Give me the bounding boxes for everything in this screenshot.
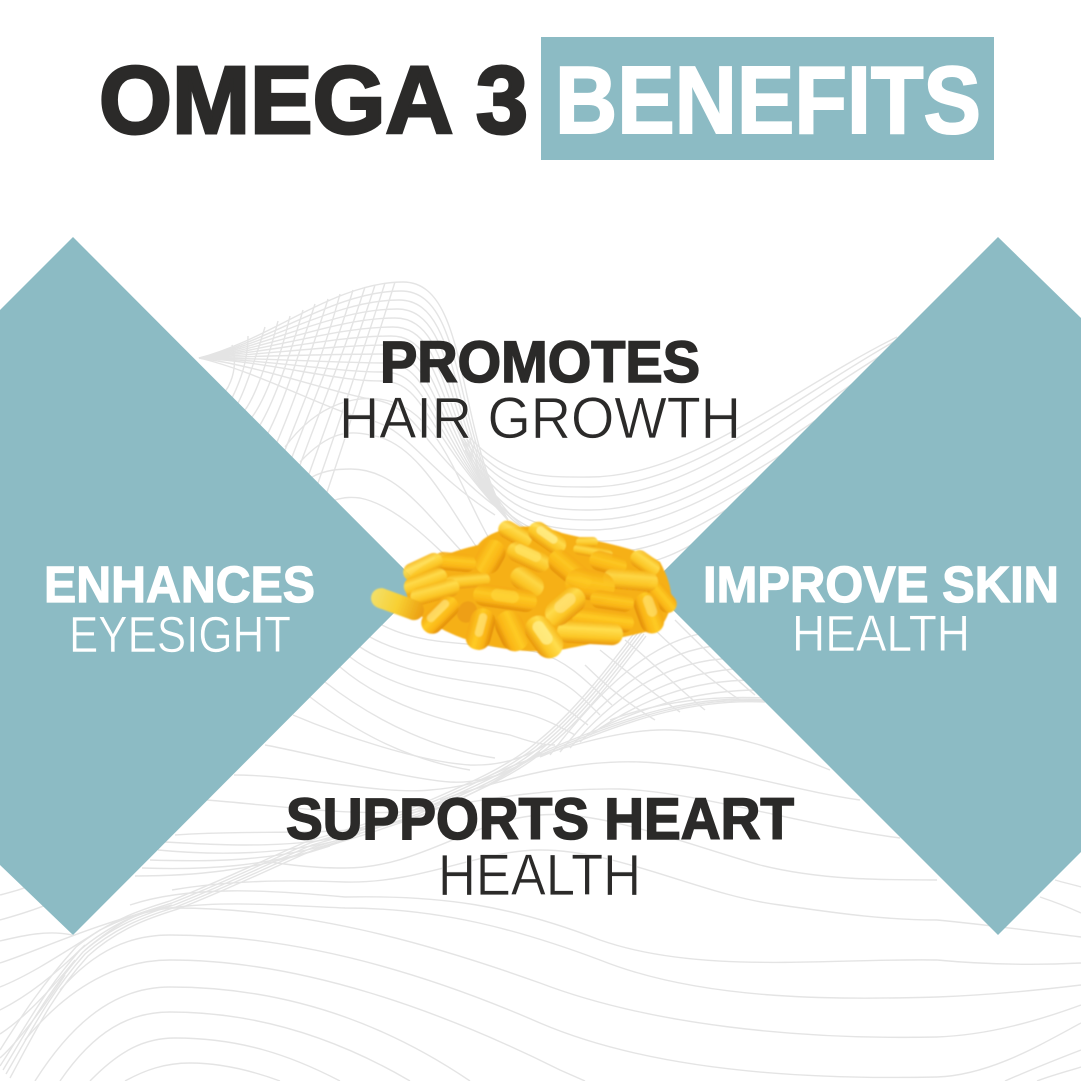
- background wave line pattern: [0, 282, 1081, 1081]
- title: OMEGA 3: OMEGA 3: [99, 47, 528, 154]
- text block: enhances eyesight: EYESIGHT: [69, 606, 291, 663]
- text block: promotes hair growth: HAIR GROWTH: [339, 386, 741, 451]
- panel: right teal chevron: [649, 237, 1081, 935]
- text block: improve skin health: HEALTH: [792, 605, 970, 662]
- text block: enhances eyesight: ENHANCES: [44, 556, 315, 613]
- text block: promotes hair growth: [339, 330, 741, 451]
- text block: supports heart health: HEALTH: [438, 843, 641, 908]
- panel: left teal chevron: [0, 237, 421, 935]
- text block: improve skin health: [703, 556, 1059, 662]
- text block: improve skin health: IMPROVE SKIN: [703, 556, 1059, 613]
- title badge: BENEFITS: BENEFITS: [555, 47, 981, 154]
- text block: promotes hair growth: PROMOTES: [380, 330, 700, 395]
- text block: supports heart health: SUPPORTS HEART: [286, 787, 794, 852]
- icon: pile of omega 3 softgel capsules: [368, 517, 680, 664]
- text block: enhances eyesight: [44, 556, 315, 663]
- text block: supports heart health: [286, 787, 794, 908]
